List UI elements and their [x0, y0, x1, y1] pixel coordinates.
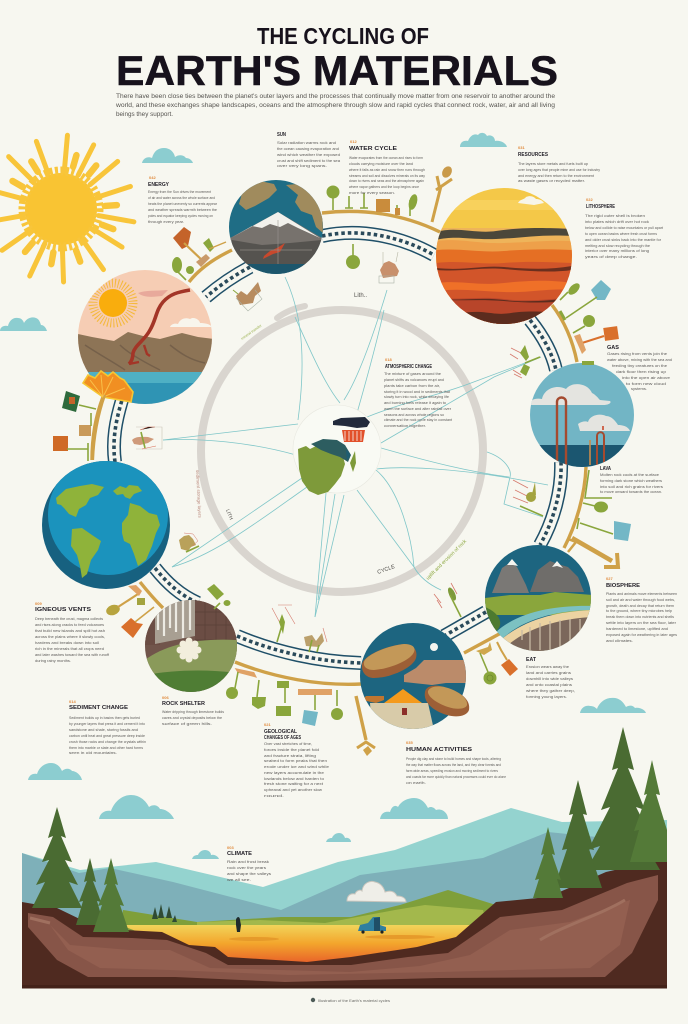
text: gas: water above, mixing with the sea and: [607, 357, 672, 362]
landscape: [22, 727, 667, 988]
central earth illustration: [293, 405, 381, 495]
central ring: sediment storage layers: [195, 470, 203, 519]
text: lithosphere: LITHOSPHERE: [586, 204, 615, 210]
text: human activities: and coasts far more quickly than natural processes could ever do alone: [406, 774, 507, 779]
text: sun: Solar radiation warms rock and: [277, 140, 336, 145]
circle: crust layers: [436, 187, 572, 327]
small icons lower right arc: [513, 470, 631, 567]
text: biosphere: soil and air and water through food webs,: [606, 597, 675, 602]
text: atmospheric change: 018: [385, 357, 392, 362]
text: igneous vents: Deep beneath the crust, magma collects: [35, 616, 103, 621]
text: energy: Energy from the Sun drives the movement: [148, 189, 212, 194]
right tree small: [533, 827, 563, 898]
text: geological changes: round.: [264, 793, 284, 798]
central ring: mineral transfer: [240, 323, 263, 341]
text: atmospheric change: The mixture of gases around the: [384, 371, 442, 376]
text: sun: wind which weather the exposed: [277, 152, 340, 157]
text: biosphere: 027: [606, 576, 613, 581]
text: gas: feeding tiny creatures on the: [612, 363, 668, 368]
text: water cycle: [349, 139, 425, 195]
central ring: [195, 293, 483, 592]
text: resources: 031: [518, 145, 525, 150]
clouds: [0, 133, 646, 859]
text: atmospheric change: ATMOSPHERIC CHANGE: [385, 364, 432, 370]
footer: Illustration of the Earth's material cycles: [318, 998, 390, 1003]
text: water cycle: 012: [350, 139, 357, 144]
text: water cycle: WATER CYCLE: [349, 146, 397, 152]
text: resources: as waste gases or recycled matter.: [518, 178, 585, 183]
text: atmospheric change: slowly turn into rock, while decaying life: [384, 394, 450, 399]
person: [236, 917, 241, 932]
text: earth: [526, 657, 575, 699]
title: EARTH'S MATERIALS: [116, 47, 558, 94]
text: sediment change: SEDIMENT CHANGE: [69, 705, 128, 711]
text: gas: to form new cloud: [626, 381, 666, 386]
text: energy: poles and equator keeping cycles moving on: [148, 213, 213, 218]
text: human activities: People dig clay and stone to build homes and shape tools, altering: [406, 756, 501, 761]
text: earth: forming young layers.: [526, 694, 567, 699]
central ring: LITH: [224, 509, 234, 521]
small icons upper left arc: [172, 227, 262, 311]
right tree medium: [554, 780, 602, 888]
small icons left arc: [53, 391, 162, 461]
text: human activities: HUMAN ACTIVITIES: [406, 747, 472, 753]
text: atmospheric change: plants take carbon from the air,: [384, 383, 440, 388]
text: atmospheric change: seasons and across whole regions so: [384, 412, 445, 417]
text: geological changes: [264, 722, 330, 798]
text: resources: The layers store metals and fuels built up: [518, 161, 589, 166]
text: biosphere: hardened to limestone, uplifted and: [606, 626, 668, 631]
text: lithosphere: below and collide to raise mountains or pull apart: [585, 225, 664, 230]
text: lithosphere: [585, 197, 664, 259]
text: biosphere: settle into layers on the sea floor, later: [606, 620, 677, 625]
text: climate: rock over the years: [227, 865, 266, 870]
text: igneous vents: and rises along cracks to feed volcanoes: [35, 622, 104, 627]
text: geological changes: seabed to form peaks that then: [264, 758, 327, 763]
text: igneous vents: [35, 601, 110, 663]
text: igneous vents: that build new islands and spill hot ash: [35, 628, 105, 633]
text: biosphere: and climates.: [606, 638, 633, 643]
text: sun: crust and shift sediment to the sea: [277, 158, 341, 163]
text: human activities: [406, 740, 507, 785]
central ring: CYCLE: [377, 564, 396, 576]
text: earth: and onto coastal plains: [526, 682, 572, 687]
text: biosphere: growth, death and decay that return them: [606, 603, 675, 608]
text: lithosphere: interior over many millions of long: [585, 248, 649, 253]
intro paragraph: beings they support.: [116, 112, 173, 118]
text: igneous vents: hardens and breaks down into soil: [35, 640, 99, 645]
text: climate: we all see.: [227, 877, 251, 882]
text: geological changes: Over vast stretches of time,: [264, 741, 312, 746]
text: rock shelter: 006: [162, 695, 169, 700]
circle: volcano on globe: [228, 178, 326, 278]
text: geological changes: new layers accumulate in the: [264, 770, 325, 775]
text: lava: Molten rock cools at the surface: [600, 472, 660, 477]
text: igneous vents: across the plains where it slowly cools,: [35, 634, 105, 639]
text: lithosphere: into plates which drift over hot rock: [585, 219, 649, 224]
text: sediment change: Sediment builds up in basins then gets buried: [69, 715, 140, 720]
text: lava: [600, 466, 663, 494]
text: rock shelter: ROCK SHELTER: [162, 701, 205, 707]
text: igneous vents: rich in the minerals that all crops need: [35, 646, 104, 651]
text: resources: RESOURCES: [518, 152, 548, 158]
text: atmospheric change: [384, 357, 453, 428]
text: gas: dark floor then rising up: [616, 369, 667, 374]
text: sun: the ocean causing evaporation and: [277, 146, 339, 151]
left tree medium: [93, 858, 129, 932]
tan stalk under flower: [93, 395, 105, 460]
text: sediment change: by younger layers that press it and cement it into: [69, 721, 146, 726]
text: water cycle: where it falls as rain and snow then runs through: [349, 167, 425, 172]
tiny trees: [152, 904, 177, 922]
text: lithosphere: 022: [586, 197, 593, 202]
text: sun: over very long spans.: [277, 163, 327, 168]
text: sediment change: 014: [69, 699, 76, 704]
text: rock shelter: [162, 695, 224, 726]
title: [116, 23, 558, 94]
text: igneous vents: IGNEOUS VENTS: [35, 607, 91, 613]
intro paragraph: [115, 94, 556, 118]
text: energy: 042: [149, 175, 156, 180]
text: lithosphere: The rigid outer shell is broken: [585, 213, 645, 218]
white cloud: [347, 881, 406, 902]
text: resources: [518, 145, 600, 183]
text: geological changes: GEOLOGICAL: [264, 729, 298, 735]
icon: sun: [0, 135, 134, 282]
earth cross section: [22, 858, 667, 988]
text: energy: ENERGY: [148, 182, 169, 188]
text: lithosphere: to open ocean basins where fresh crust forms: [585, 231, 657, 236]
text: energy: heats the planet unevenly so currents appear: [148, 201, 218, 206]
text: resources: over long ages that people mine and use for industry: [518, 167, 600, 172]
central ring: uplift and erosion of rock: [425, 538, 468, 581]
left tree small: [76, 858, 104, 925]
text: rock shelter: caves and crystal deposits below the: [162, 715, 223, 720]
text: atmospheric change: and burning fuels release it again to: [384, 400, 447, 405]
text: gas: systems.: [631, 386, 647, 391]
small icons right arc: [510, 280, 619, 378]
circle: ocean and vents: [528, 362, 636, 470]
text: biosphere: exposed again for weathering in later ages: [606, 632, 677, 637]
small icons mountain to rock arc: [434, 583, 518, 684]
text: human activities: the way that matter flows across the land, and they clear forests and: [406, 762, 501, 767]
text: geological changes: fresh stone waiting for a next: [264, 781, 324, 786]
circle: earth globe: [42, 461, 170, 589]
text: biosphere: break them down into nutrients and shells: [606, 614, 674, 619]
text: water cycle: Water evaporates from the ocean and rises to form: [349, 155, 424, 160]
text: water cycle: clouds carrying moisture over the land: [349, 161, 413, 166]
connector lines: [163, 277, 548, 617]
text: atmospheric change: planet shifts as volcanoes erupt and: [384, 377, 444, 382]
text: resources: and energy and then return to the environment: [518, 173, 595, 178]
text: lava: into soil and rich grains for rivers: [600, 484, 663, 489]
small icons lower left arc: [105, 533, 230, 638]
vehicle: [358, 917, 386, 931]
central ring: Lith..: [354, 293, 367, 299]
text: lava: to move onward towards the ocean.: [600, 489, 662, 494]
circle: rock slabs: [360, 623, 466, 729]
text: sediment change: [69, 699, 146, 755]
text: sun: [277, 132, 341, 168]
icon: flame flower: [83, 371, 133, 402]
text: rock shelter: surface of green hills.: [162, 721, 212, 726]
small icons along top arc: [326, 165, 454, 283]
text: energy: and weather spreads warmth between the: [148, 207, 218, 212]
text: water cycle: more for every season.: [349, 190, 395, 195]
text: gas: [607, 345, 672, 391]
text: human activities: farm wide areas, speeding erosion and moving sediment to rivers: [406, 768, 498, 773]
text: geological changes: lowlands below and harden to: [264, 776, 325, 781]
left tree large: [32, 807, 82, 908]
text: earth: land and carries grains: [526, 670, 571, 675]
text: geological changes: 021: [264, 722, 271, 727]
text: lithosphere: melting and slow recycling through the: [585, 243, 651, 248]
text: geological changes: CHANGES OF AGES: [264, 735, 301, 741]
text: earth: Erosion wears away the: [526, 664, 570, 669]
text: earth: where they gather deep,: [526, 688, 575, 693]
text: climate: 003: [227, 845, 234, 850]
circle: mountains and strata: [485, 545, 591, 651]
title: THE CYCLING OF: [257, 23, 429, 49]
text: lithosphere: years of deep change.: [585, 254, 637, 259]
text: energy: [148, 175, 218, 224]
text: gas: into the open air above: [622, 375, 671, 380]
text: sediment change: sandstone and shale, storing fossils and: [69, 727, 138, 732]
text: geological changes: forces inside the planet fold: [264, 747, 319, 752]
text: atmospheric change: storing it in wood and in sediments that: [384, 389, 451, 394]
belt and arc track: [92, 211, 586, 684]
text: biosphere: BIOSPHERE: [606, 583, 640, 589]
text: gas: Gases rising from vents join the: [607, 351, 668, 356]
mid teal mountains: [22, 832, 667, 960]
text: earth: downhill into wide valleys: [526, 676, 573, 681]
right tree big: [586, 727, 660, 870]
intro paragraph: world, and these exchanges shape landscapes, oceans and the atmosphere through slow and rapid cycles that connect rock, water, air and all living: [115, 103, 555, 109]
text: geological changes: erode under ice and wind while: [264, 764, 330, 769]
text: human activities: 035: [406, 740, 413, 745]
text: geological changes: upheaval and yet another slow: [264, 787, 322, 792]
text: human activities: on earth.: [406, 780, 426, 785]
circle: cave forest: [143, 598, 239, 694]
text: gas: GAS: [607, 345, 619, 351]
text: biosphere: [606, 576, 677, 643]
text: rock shelter: Water dripping through limestone builds: [162, 709, 224, 714]
text: lava: forming dark stone which weathers: [600, 478, 662, 483]
text: lithosphere: and older crust sinks back into the mantle for: [585, 237, 662, 242]
icon: rock discs: [362, 644, 469, 716]
text: igneous vents: and later washes toward the sea with runoff: [35, 652, 110, 657]
distant light mountains: [22, 808, 667, 960]
right tree tall: [630, 760, 667, 862]
text: energy: through every year.: [148, 219, 184, 224]
text: sediment change: carbon until heat and great pressure deep inside: [69, 733, 146, 738]
text: water cycle: streams and soil and dissolves minerals on its way: [349, 173, 425, 178]
text: climate: CLIMATE: [227, 851, 252, 857]
text: atmospheric change: warm the surface and alter rainfall over: [384, 406, 452, 411]
text: biosphere: to the ground, where tiny microbes help: [606, 608, 673, 613]
text: climate: [227, 845, 271, 882]
text: climate: and shape the valleys: [227, 871, 271, 876]
text: geological changes: and fracture strata, lifting: [264, 753, 316, 758]
small icons lower arc: [226, 605, 375, 756]
text: atmospheric change: climate and the rock cycle stay in constant: [384, 417, 453, 422]
text: igneous vents: during rainy months.: [35, 658, 71, 663]
text: water cycle: where vapor gathers and the loop begins once: [349, 184, 420, 189]
lava field: [120, 925, 475, 962]
text: sediment change: them into marble or slate and other hard forms: [69, 745, 143, 750]
text: sediment change: seen in old mountains.: [69, 750, 117, 755]
circle: desert and lava crack: [76, 268, 218, 408]
text: water cycle: down to rivers and seas and the atmosphere again: [349, 178, 424, 183]
intro paragraph: There have been close ties between the planet's outer layers and the processes that continually move matter from one reservoir to another around the: [116, 94, 556, 100]
text: sediment change: crush those rocks and change the crystals within: [69, 739, 146, 744]
text: sun: SUN: [277, 132, 286, 138]
text: climate: Rain and frost break: [227, 859, 269, 864]
text: atmospheric change: conversation together.: [384, 423, 426, 428]
text: igneous vents: 009: [35, 601, 42, 606]
text: energy: of air and water across the whole surface and: [148, 195, 215, 200]
text: earth: EAT: [526, 657, 537, 663]
text: lava: LAVA: [600, 466, 611, 472]
text: biosphere: Plants and animals move elements between: [606, 591, 677, 596]
green hills: [120, 890, 510, 935]
